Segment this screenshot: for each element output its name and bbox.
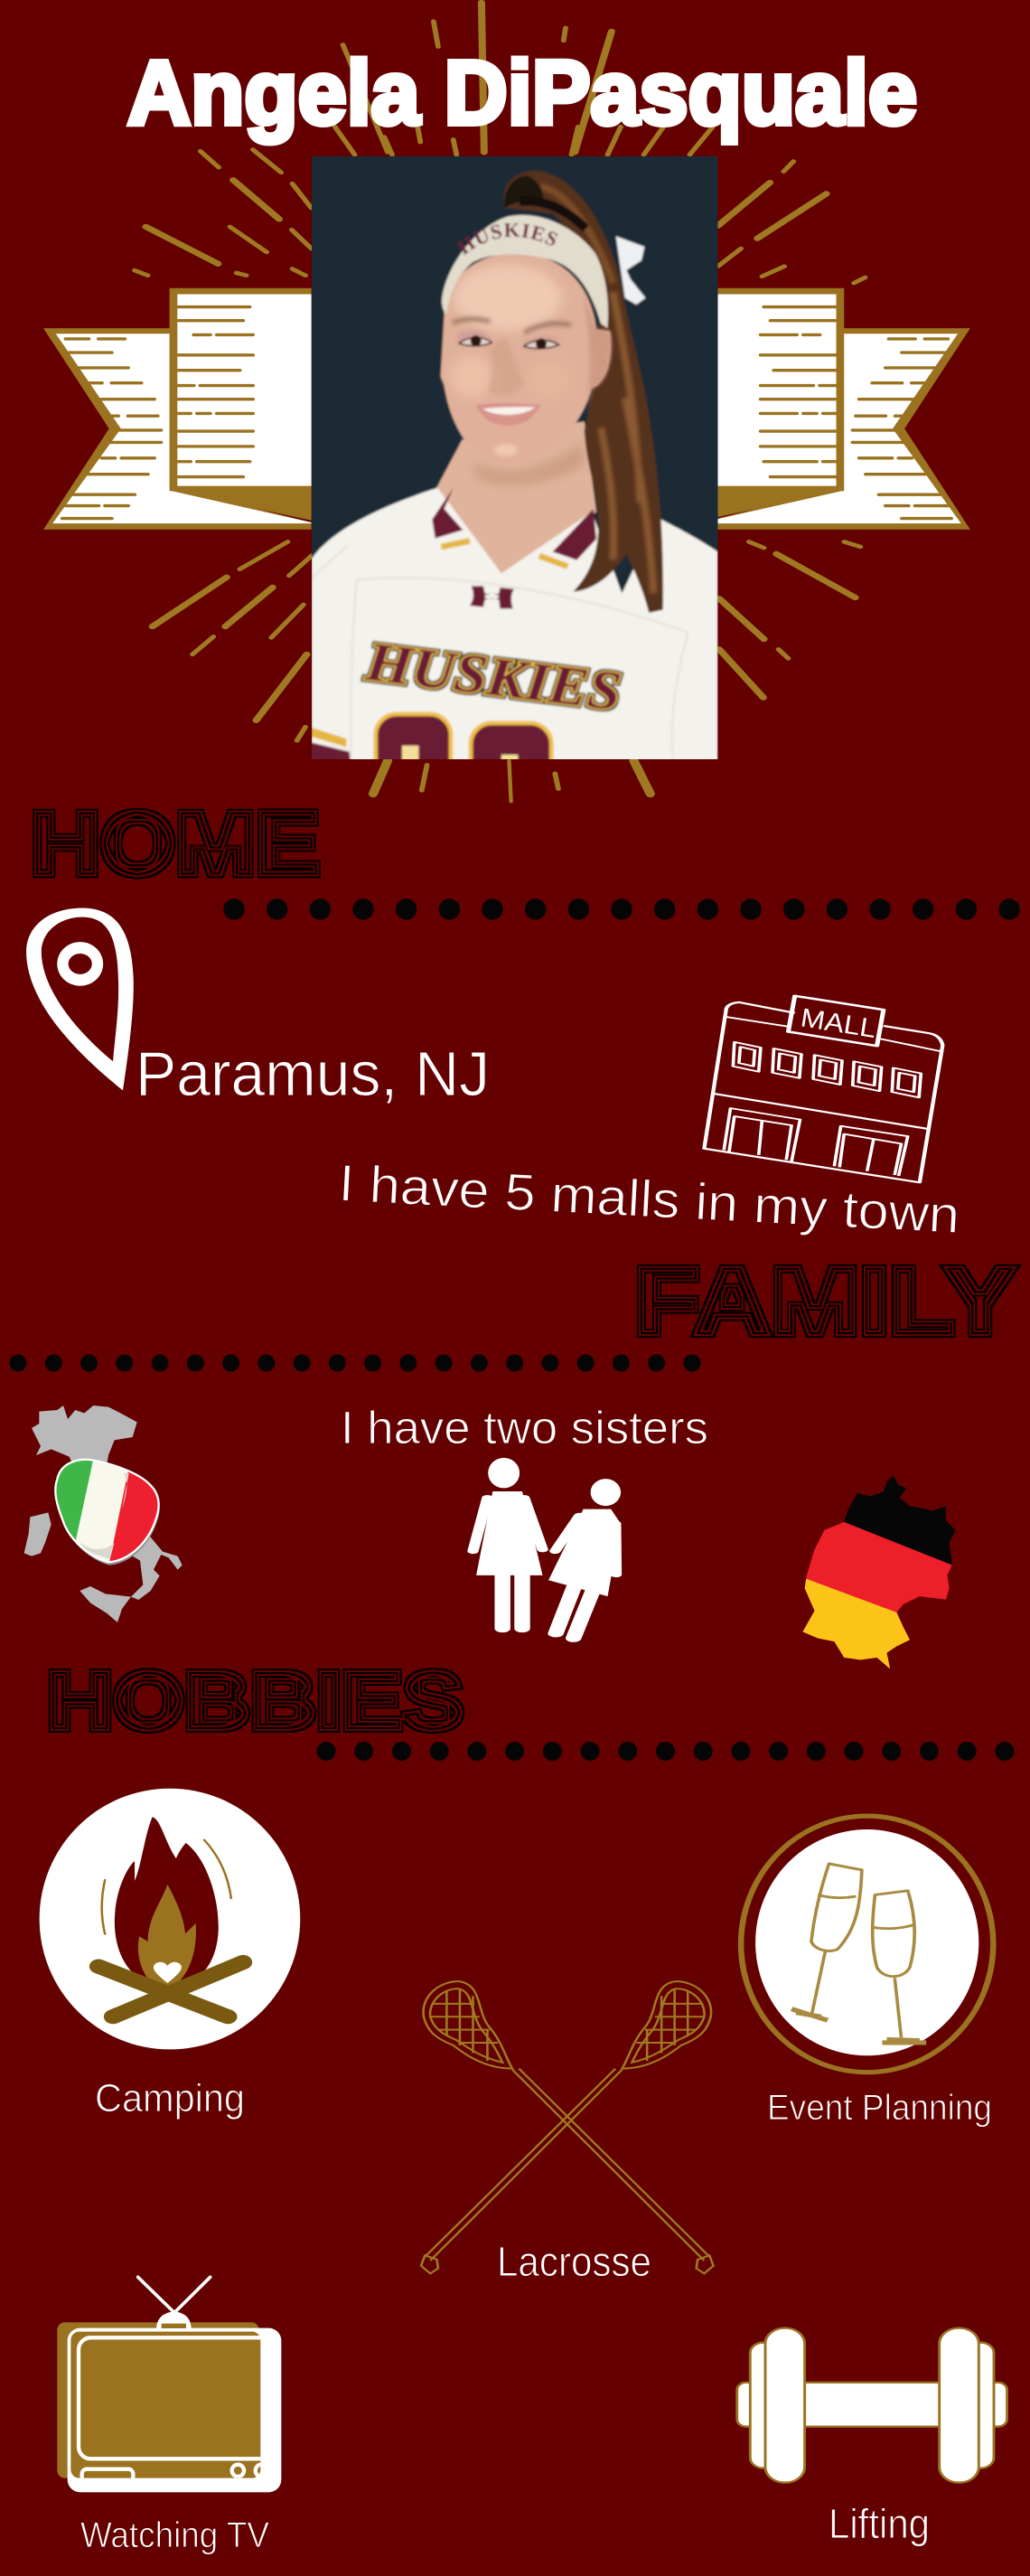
- jersey lettering: HUSKIES: [362, 631, 624, 723]
- headband text: HUSKIES: [455, 222, 558, 256]
- text: Paramus, NJ: Paramus, NJ: [136, 1039, 490, 1109]
- hobby: watching tv: [57, 2277, 281, 2555]
- label: camping: Camping: [95, 2076, 245, 2120]
- right stick: [421, 1981, 711, 2273]
- hobby: lacrosse: [421, 1981, 714, 2285]
- logo: [470, 586, 514, 608]
- lower jersey details: [312, 586, 624, 813]
- icon: dumbbell: [737, 2328, 1007, 2483]
- dotted divider: family: [18, 1354, 693, 1372]
- jersey: [312, 488, 717, 765]
- icon: two sisters: [473, 1458, 621, 1638]
- label: watching tv: Watching TV: [80, 2515, 269, 2555]
- portrait photo: [312, 156, 717, 759]
- left ribbon: [43, 288, 312, 530]
- icon: mall building: [704, 996, 942, 1182]
- hobby: camping: [40, 1789, 300, 2120]
- right ribbon: [702, 288, 970, 530]
- ponytail: [503, 171, 663, 613]
- icon: map pin: [26, 908, 134, 1090]
- headband: [442, 215, 608, 328]
- bow: [616, 236, 645, 305]
- icon: crossed lacrosse sticks: [421, 1981, 714, 2273]
- icon: campfire: [40, 1789, 300, 2049]
- hobby: lifting: [737, 2328, 1007, 2547]
- face: [439, 253, 613, 441]
- jersey number: [376, 714, 451, 804]
- heading: family: FAMILY: [634, 1249, 1016, 1354]
- text: malls: I have 5 malls in my town: [337, 1154, 961, 1245]
- neck: [436, 421, 596, 574]
- label: lacrosse: Lacrosse: [497, 2238, 651, 2285]
- heading: home: HOME: [31, 794, 320, 893]
- mouth: [476, 403, 540, 426]
- text: two sisters: I have two sisters: [341, 1402, 708, 1453]
- left stick: [424, 1981, 714, 2273]
- eyes: [459, 338, 492, 346]
- icon: champagne glasses: [741, 1816, 993, 2073]
- dotted divider: hobbies: [326, 1742, 1006, 1761]
- facial features: [453, 319, 571, 395]
- sunburst rays: [135, 3, 866, 802]
- flag shield: [54, 1459, 160, 1565]
- title: Angela DiPasquale: [127, 42, 917, 144]
- dotted divider: home: [234, 898, 1010, 920]
- label: lifting: Lifting: [829, 2500, 930, 2547]
- hobby: event planning: [741, 1816, 993, 2128]
- label: event planning: Event Planning: [767, 2088, 992, 2128]
- icon: germany map flag: [802, 1475, 956, 1669]
- icon: italy map with flag: [24, 1406, 183, 1622]
- icon: television: [57, 2277, 281, 2492]
- collar: [432, 488, 463, 539]
- heading: hobbies: HOBBIES: [47, 1656, 464, 1746]
- mall sign text: MALL: [799, 1003, 878, 1044]
- ribbon banner: [43, 288, 970, 530]
- sleeve band: [312, 728, 346, 747]
